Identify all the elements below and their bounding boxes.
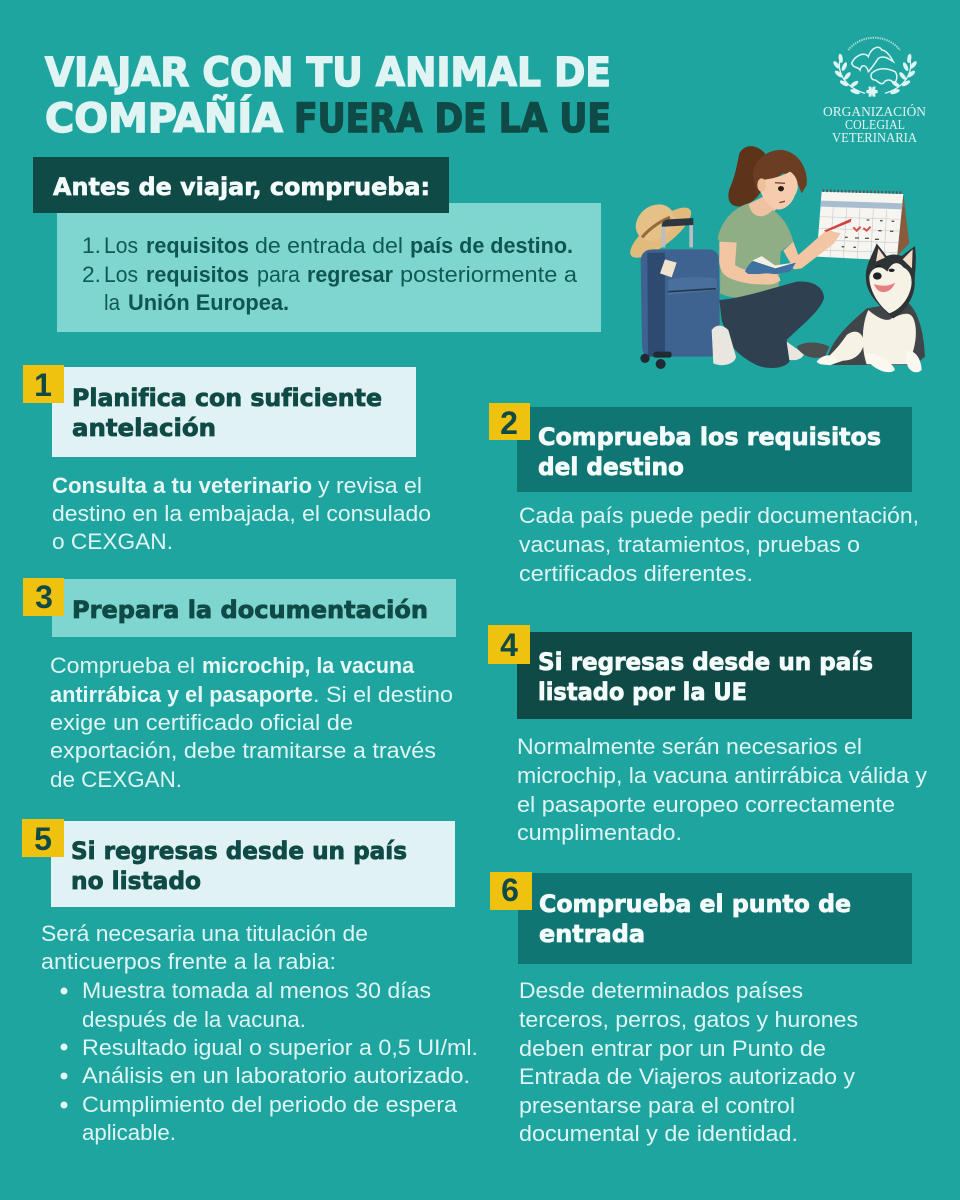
step 1 text: Consulta a tu veterinario [52, 473, 312, 498]
logo: Organización Colegial Veterinaria [823, 38, 926, 146]
step 6 text: presentarse para el control [519, 1093, 795, 1118]
step 6 text: documental y de identidad. [519, 1121, 798, 1146]
badge 2 [489, 403, 530, 441]
step 4 text: cumplimentado. [517, 820, 682, 845]
step 6 text: Entrada de Viajeros autorizado y [519, 1064, 856, 1089]
step 3 text: exige un certificado oficial de [50, 710, 353, 735]
banner heading [33, 157, 449, 213]
step 6 heading [518, 873, 912, 964]
step 6 heading: entrada [539, 920, 645, 948]
icon: woman reading [712, 146, 852, 368]
checklist box [57, 203, 601, 332]
checklist box: Los [104, 233, 138, 258]
step 1 text: o CEXGAN. [52, 529, 173, 554]
title: COMPAÑÍA [45, 94, 283, 142]
step 5 heading: Si regresas desde un país [71, 837, 407, 865]
panel: antes de viajar [33, 157, 601, 332]
step 4 text: el pasaporte europeo correctamente [517, 792, 895, 817]
step 3 text [50, 653, 453, 792]
step 5 text: después de la vacuna. [82, 1007, 306, 1032]
step 1 text: y revisa el [318, 473, 422, 498]
badge 4: 4 [500, 627, 518, 663]
step 1 text: destino en la embajada, el consulado [52, 501, 431, 526]
step 3 text: antirrábica y el pasaporte [50, 682, 313, 707]
step 4 text: microchip, la vacuna antirrábica válida y [517, 763, 928, 788]
step 2 text: vacunas, tratamientos, pruebas o [519, 532, 860, 557]
step 5 text [41, 921, 478, 1145]
step 5 text: aplicable. [82, 1120, 176, 1145]
banner heading: Antes de viajar, comprueba: [53, 173, 430, 201]
step 1 heading: antelación [72, 414, 216, 442]
step 3 heading [52, 579, 456, 637]
checklist box: requisitos [146, 262, 249, 287]
logo: Organización Colegial Veterinaria: COLEGIAL [845, 118, 905, 133]
step 3 text: . Si el destino [313, 682, 453, 707]
badge 3: 3 [35, 579, 53, 615]
title [45, 50, 611, 142]
badge 1 [23, 365, 64, 403]
checklist box: 1. [82, 233, 101, 258]
icon: husky dog [797, 243, 925, 372]
badge 5: 5 [34, 821, 52, 857]
step 1 heading: Planifica con suficiente [72, 384, 382, 412]
step 6 text: deben entrar por un Punto de [519, 1036, 826, 1061]
step 5 text: Muestra tomada al menos 30 días [82, 978, 431, 1003]
checklist box: país de destino. [410, 233, 573, 258]
step 3 text: microchip, la vacuna [202, 653, 414, 678]
step 4 heading [517, 632, 912, 719]
step 6 text: terceros, perros, gatos y hurones [519, 1007, 858, 1032]
step 2 text: certificados diferentes. [519, 561, 753, 586]
step 4 heading: listado por la UE [538, 678, 747, 706]
step 2 text [519, 503, 919, 586]
step 3 heading: Prepara la documentación [72, 596, 428, 624]
step 4 text [517, 734, 928, 845]
step 6 heading: Comprueba el punto de [539, 890, 851, 918]
checklist box: regresar [307, 262, 393, 287]
badge 2: 2 [500, 405, 518, 441]
step 5 text: anticuerpos frente a la rabia: [41, 949, 336, 974]
step 5 text: Será necesaria una titulación de [41, 921, 368, 946]
panel: step 3 [23, 578, 456, 792]
badge 6: 6 [501, 872, 519, 908]
checklist box: requisitos [146, 233, 249, 258]
title: VIAJAR CON TU ANIMAL DE [45, 50, 611, 96]
badge 5 [22, 819, 64, 857]
step 3 text: Comprueba el [50, 653, 195, 678]
icon: straw hat [623, 197, 698, 266]
badge 1: 1 [34, 367, 52, 403]
badge 3 [23, 578, 64, 616]
step 2 text: Cada país puede pedir documentación, [519, 503, 919, 528]
checklist box: la [104, 290, 120, 315]
step 6 text: Desde determinados países [519, 978, 803, 1003]
panel: step 2 [489, 403, 919, 586]
step 4 heading: Si regresas desde un país [538, 648, 873, 676]
step 4 text: Normalmente serán necesarios el [517, 734, 862, 759]
checklist box: Los [104, 262, 138, 287]
step 1 text [52, 473, 431, 554]
checklist box: de entrada del [255, 233, 403, 258]
step 1 heading [52, 367, 416, 457]
step 5 text: Análisis en un laboratorio autorizado. [82, 1063, 470, 1088]
step 2 heading: Comprueba los requisitos [538, 423, 881, 451]
step 5 heading: no listado [71, 867, 201, 895]
title: FUERA DE LA UE [294, 96, 611, 142]
panel: step 5 [22, 819, 478, 1145]
panel: step 1 [23, 365, 431, 554]
badge 6 [490, 872, 532, 910]
badge 4 [488, 625, 530, 664]
step 2 heading: del destino [538, 453, 684, 481]
panel: step 4 [488, 625, 928, 845]
checklist box: Unión Europea. [128, 290, 289, 315]
step 5 text: Cumplimiento del periodo de espera [82, 1092, 457, 1117]
illustration: woman with suitcase, calendar and husky [623, 146, 925, 372]
step 5 heading [51, 821, 455, 907]
step 3 text: exportación, debe tramitarse a través [50, 738, 436, 763]
step 5 text: Resultado igual o superior a 0,5 UI/ml. [82, 1035, 478, 1060]
panel: step 6 [490, 872, 912, 1146]
checklist box: para [257, 262, 300, 287]
checklist box: posteriormente a [400, 262, 578, 287]
logo: Organización Colegial Veterinaria: ORGANIZACIÓN [823, 103, 926, 120]
step 2 heading [517, 407, 912, 492]
step 6 text [519, 978, 858, 1146]
icon: suitcase [640, 218, 720, 369]
icon: calendar [817, 191, 909, 261]
logo: Organización Colegial Veterinaria: VETERINARIA [832, 131, 918, 146]
step 3 text: de CEXGAN. [50, 767, 182, 792]
checklist box: 2. [82, 262, 101, 287]
